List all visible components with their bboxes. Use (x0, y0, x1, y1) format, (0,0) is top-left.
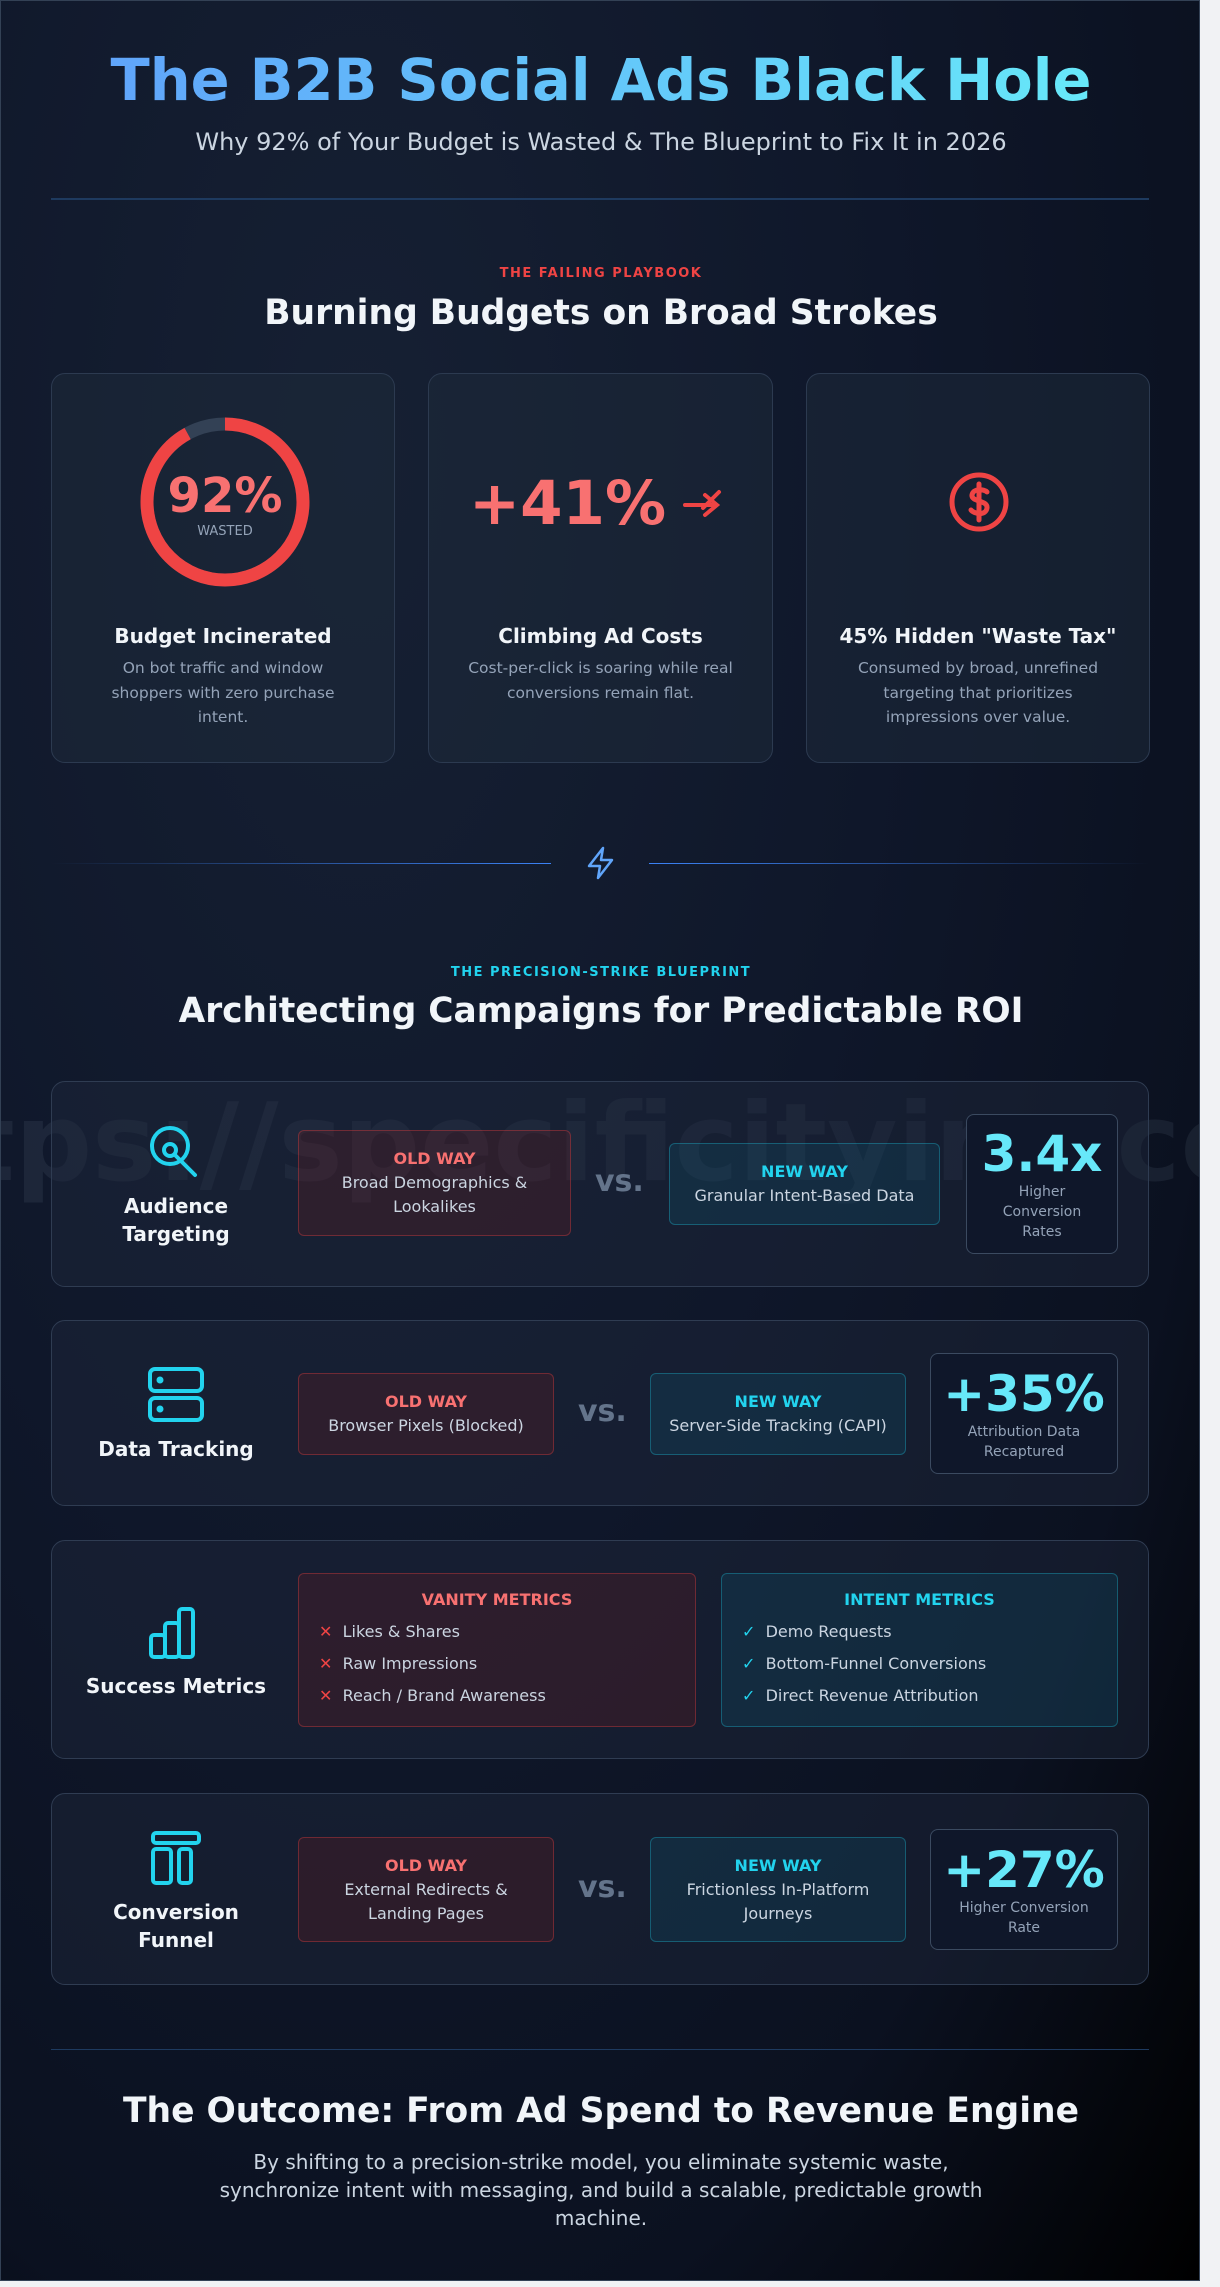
stat: +27%: Higher Conversion (959, 1900, 1089, 1916)
panel: waste tax (806, 373, 1150, 763)
row: audience targeting (51, 1081, 1149, 1287)
new way box (650, 1837, 906, 1942)
row: audience targeting: vs. (595, 1164, 644, 1199)
row: audience targeting: Targeting (122, 1222, 230, 1246)
icon: dollar (950, 472, 1008, 532)
vanity metrics box: VANITY METRICS (422, 1590, 572, 1609)
icon: trending arrow (683, 490, 722, 518)
old way box: Landing Pages (368, 1904, 484, 1922)
vanity metrics box (298, 1573, 696, 1727)
panel: budget incinerated: On bot traffic and window shoppers with zero purchase intent. (111, 659, 335, 726)
new way box: NEW WAY (735, 1856, 821, 1874)
new way box (650, 1373, 906, 1455)
old way box: Broad Demographics & (342, 1173, 527, 1192)
stat: 3.4x: Higher (1019, 1184, 1065, 1200)
row: data tracking: vs. (578, 1394, 627, 1429)
section label: blueprint: THE PRECISION-STRIKE BLUEPRINT (451, 965, 751, 980)
old way box: OLD WAY (393, 1149, 476, 1168)
row: success metrics (51, 1540, 1149, 1759)
intent metrics box: ✓ Direct Revenue Attribution (742, 1686, 979, 1705)
panel: waste tax: Consumed by broad, unrefined targeting that prioritizes impressions over value. (858, 659, 1098, 726)
stat: 3.4x: 3.4x (982, 1125, 1102, 1183)
new way box: Granular Intent-Based Data (694, 1186, 914, 1205)
new way box: Server-Side Tracking (CAPI) (669, 1416, 887, 1435)
old way box: OLD WAY (385, 1392, 467, 1411)
row: conversion funnel: vs. (578, 1870, 627, 1905)
stat: 3.4x: Rates (1022, 1224, 1062, 1240)
outcome heading: The Outcome: From Ad Spend to Revenue Engine (123, 2091, 1079, 2131)
new way box (669, 1143, 940, 1225)
old way box (298, 1837, 554, 1942)
old way box (298, 1130, 571, 1236)
stat: 3.4x: Conversion (1003, 1204, 1081, 1220)
intent metrics box: ✓ Demo Requests (742, 1622, 892, 1641)
row: data tracking (51, 1320, 1149, 1506)
vanity metrics box: ✕ Reach / Brand Awareness (319, 1686, 546, 1705)
row: conversion funnel: Funnel (138, 1928, 214, 1952)
stat: +27% (930, 1829, 1118, 1950)
panel: climbing ad costs: Cost-per-click is soaring while real conversions remain flat. (468, 659, 733, 702)
heading: architecting: Architecting Campaigns for Predictable ROI (179, 991, 1023, 1031)
icon: lightning (588, 846, 614, 880)
stat: +35%: Attribution Data (968, 1424, 1080, 1440)
new way box: Frictionless In-Platform (687, 1880, 869, 1898)
subtitle: Why 92% of Your Budget is Wasted & The Blueprint to Fix It in 2026 (195, 128, 1007, 156)
new way box: NEW WAY (761, 1162, 848, 1181)
intent metrics box: INTENT METRICS (844, 1590, 995, 1609)
icon: bar chart (149, 1607, 195, 1659)
section label: failing playbook: THE FAILING PLAYBOOK (500, 266, 702, 281)
stat: +35% (930, 1353, 1118, 1474)
old way box: Browser Pixels (Blocked) (328, 1416, 524, 1435)
panel: climbing ad costs (428, 373, 773, 763)
stat: +27%: +27% (943, 1840, 1105, 1898)
row: success metrics: Success Metrics (86, 1674, 266, 1698)
new way box: Journeys (744, 1904, 812, 1922)
donut chart: WASTED (197, 524, 253, 539)
old way box (298, 1373, 554, 1455)
row: data tracking: Data Tracking (98, 1437, 254, 1461)
heading: burning budgets: Burning Budgets on Broad Strokes (264, 293, 938, 333)
stat: +27%: Rate (1008, 1920, 1040, 1936)
row: audience targeting: Audience (124, 1194, 228, 1218)
icon: layout (151, 1831, 201, 1885)
intent metrics box (721, 1573, 1118, 1727)
old way box: Lookalikes (393, 1197, 476, 1216)
vanity metrics box: ✕ Likes & Shares (319, 1622, 460, 1641)
divider with lightning icon (72, 863, 1129, 864)
row: conversion funnel: Conversion (113, 1900, 239, 1924)
old way box: OLD WAY (385, 1856, 467, 1874)
stat: +35%: +35% (943, 1364, 1105, 1422)
old way box: External Redirects & (344, 1880, 508, 1898)
stat: 3.4x (966, 1114, 1118, 1254)
title: The B2B Social Ads Black Hole (110, 47, 1092, 114)
panel: climbing ad costs: Climbing Ad Costs (498, 624, 703, 648)
new way box: NEW WAY (735, 1392, 821, 1411)
donut chart (140, 418, 310, 586)
intent metrics box: ✓ Bottom-Funnel Conversions (742, 1654, 986, 1673)
outcome paragraph: By shifting to a precision-strike model, you eliminate systemic waste, synchronize intent with messaging, and build a scalable, predictable growth machine. (220, 2150, 982, 2230)
vanity metrics box: ✕ Raw Impressions (319, 1654, 477, 1673)
panel: budget incinerated (51, 373, 395, 763)
panel: budget incinerated: Budget Incinerated (114, 624, 332, 648)
donut chart: 92% (168, 468, 282, 524)
icon: search (150, 1126, 198, 1178)
panel: waste tax: 45% Hidden "Waste Tax" (840, 624, 1116, 648)
stat: +41%: +41% (469, 468, 666, 539)
row: conversion funnel (51, 1793, 1149, 1985)
icon: server (148, 1367, 204, 1422)
stat: +35%: Recaptured (984, 1444, 1064, 1460)
